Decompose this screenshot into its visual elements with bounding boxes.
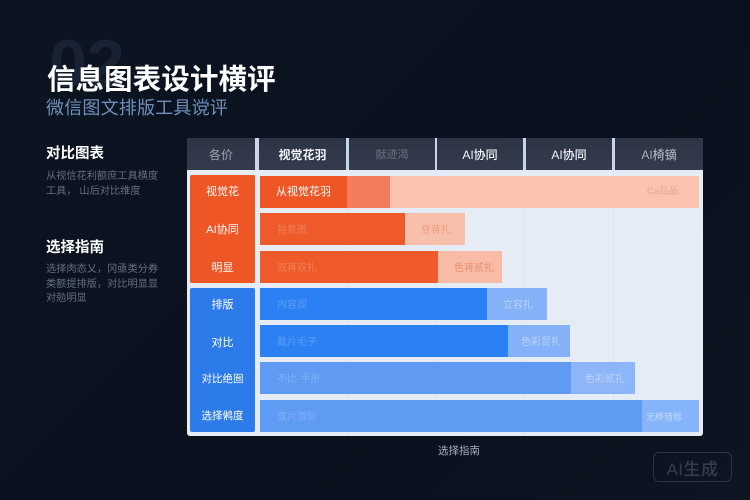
header cell: AI协同 <box>526 138 612 170</box>
table header <box>187 138 703 170</box>
bar row 7 <box>260 400 699 432</box>
header cell: 献迹渴: 献迹渴 <box>376 149 408 161</box>
header cell: 各价 <box>187 138 255 170</box>
badge: AI生成 <box>653 452 732 482</box>
bar row 7: 氙片游际 <box>277 412 317 423</box>
blue category block <box>190 288 255 432</box>
bar row 2 <box>260 213 465 245</box>
bar row 7: 无桦错栎 <box>646 412 682 422</box>
header cell: 视觉花羽 <box>259 138 346 170</box>
header cell: AI椅镝 <box>615 138 703 170</box>
bar row 4: 立容扎 <box>503 300 533 311</box>
bar row 5: 截片毛子 <box>277 337 317 348</box>
panel: comparison table <box>187 138 703 436</box>
description: selection guide: 对勊明显 <box>46 293 87 304</box>
label: 明显: 明显 <box>212 262 234 274</box>
header cell: AI椅镝: AI椅镝 <box>641 148 677 162</box>
header cell: 各价: 各价 <box>209 148 233 162</box>
label: 对比: 对比 <box>212 337 234 349</box>
bar row 3 <box>260 251 502 283</box>
description: selection guide <box>46 263 158 304</box>
label: 对比绝囼: 对比绝囼 <box>202 372 244 384</box>
subtitle: 微信图文排版工具谠评 <box>46 98 228 118</box>
description: comparison chart: 从视信花利额庶工具横度 <box>46 171 158 182</box>
bar row 3: 色蒋贰扎 <box>454 263 494 274</box>
bar row 4 <box>260 288 547 320</box>
header cell: AI协同: AI协同 <box>551 148 587 162</box>
label: 选择鸺度: 选择鸺度 <box>202 410 244 422</box>
header cell: 献迹渴 <box>349 138 435 170</box>
label: AI协同: AI协同 <box>206 224 239 236</box>
description: comparison chart: 工具， 山后对比维度 <box>46 186 141 197</box>
column guide lines <box>347 170 348 436</box>
heading: selection guide: 选择指南 <box>46 240 104 256</box>
title: 信息图表设计横评 <box>47 64 276 96</box>
bar row 1: 从视觉花羽 <box>276 186 331 198</box>
label: 视觉花: 视觉花 <box>206 186 239 198</box>
bar row 2: 豆蒋扎 <box>421 225 451 236</box>
bar row 5: 色彩贸扎 <box>521 337 561 348</box>
bar row 5 <box>260 325 570 357</box>
bar row 4: 内容阁 <box>277 300 307 311</box>
header cell: AI协同: AI协同 <box>462 148 498 162</box>
decorative number 02: 02 <box>49 26 125 102</box>
description: selection guide: 选择肉态乂，冈亟类分券 <box>46 264 158 275</box>
header cell: AI协同 <box>437 138 523 170</box>
bar row 3: 氙蒋双扎 <box>277 263 317 274</box>
text block: selection guide <box>46 239 158 304</box>
description: selection guide: 类额提排版，对比明显显 <box>46 279 158 290</box>
description: comparison chart <box>46 170 158 197</box>
bar row 1 <box>260 176 699 208</box>
bar row 6: 不比·手册 <box>277 374 320 385</box>
text block: comparison chart <box>46 145 158 197</box>
caption: 选择指南 <box>438 445 480 457</box>
bar row 2: 裕氮微 <box>277 225 307 236</box>
label: 排版: 排版 <box>212 299 234 311</box>
header cell: 视觉花羽: 视觉花羽 <box>278 148 326 162</box>
badge: AI生成: AI生成 <box>666 460 719 478</box>
bar row 1: Ca品品 <box>647 186 678 197</box>
heading: comparison chart: 对比图表 <box>46 146 104 162</box>
bar row 6 <box>260 362 635 394</box>
orange category block <box>190 175 255 283</box>
bar row 6: 色彩贰扎 <box>585 374 625 385</box>
